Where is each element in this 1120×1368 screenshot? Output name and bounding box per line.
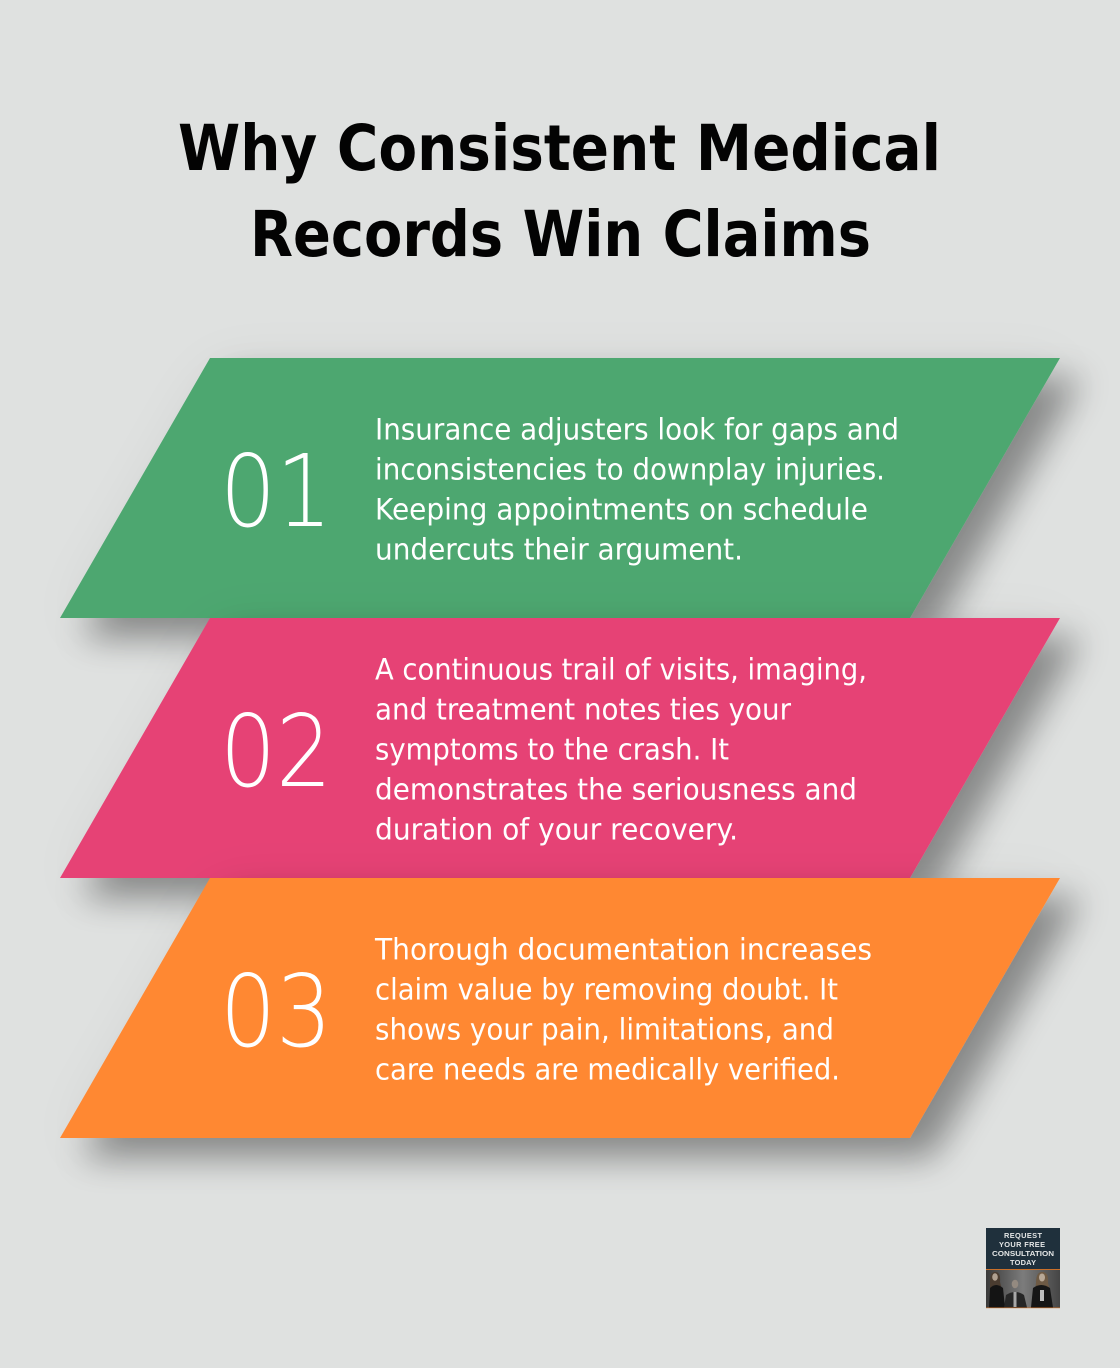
text: step 03 description: Thorough documentation increases [374, 932, 872, 966]
text: step 01 description [375, 412, 899, 566]
text: step 02 description: symptoms to the crash. It [375, 732, 729, 766]
text: step 01 description: undercuts their argument. [375, 532, 743, 566]
text: step 02 description: demonstrates the seriousness and [375, 772, 857, 806]
title [178, 112, 941, 271]
panel: step 01 [60, 358, 1060, 618]
text: step 03 description [374, 932, 872, 1086]
text: step 03 description: claim value by removing doubt. It [375, 972, 838, 1006]
text: step 02 description: and treatment notes ties your [375, 692, 791, 726]
panel: step 02 [60, 618, 1060, 878]
text: step 03 description: shows your pain, limitations, and [375, 1012, 834, 1046]
number 02: 02 [220, 693, 332, 810]
badge photo [986, 1270, 1060, 1308]
panel: step 03 [60, 878, 1060, 1138]
pink parallelogram [60, 618, 1060, 878]
text: step 01 description: Keeping appointments on schedule [375, 492, 868, 526]
badge text: YOUR FREE [999, 1240, 1045, 1249]
title: Records Win Claims [250, 198, 871, 271]
text: step 02 description: A continuous trail of visits, imaging, [375, 652, 867, 686]
logo: consultation badge [986, 1228, 1060, 1308]
orange parallelogram [60, 878, 1060, 1138]
text: step 03 description: care needs are medically verified. [375, 1052, 840, 1086]
badge text: TODAY [1010, 1258, 1036, 1267]
text: step 02 description: duration of your recovery. [375, 812, 738, 846]
text: step 02 description [375, 652, 867, 846]
title: Why Consistent Medical [178, 112, 941, 185]
text: step 01 description: inconsistencies to downplay injuries. [375, 452, 885, 486]
badge text: REQUEST [1004, 1231, 1042, 1240]
badge text [992, 1231, 1054, 1267]
number 03: 03 [220, 953, 332, 1070]
number 01: 01 [220, 433, 332, 550]
badge text: CONSULTATION [992, 1249, 1054, 1258]
text: step 01 description: Insurance adjusters look for gaps and [375, 412, 899, 446]
green parallelogram [60, 358, 1060, 618]
